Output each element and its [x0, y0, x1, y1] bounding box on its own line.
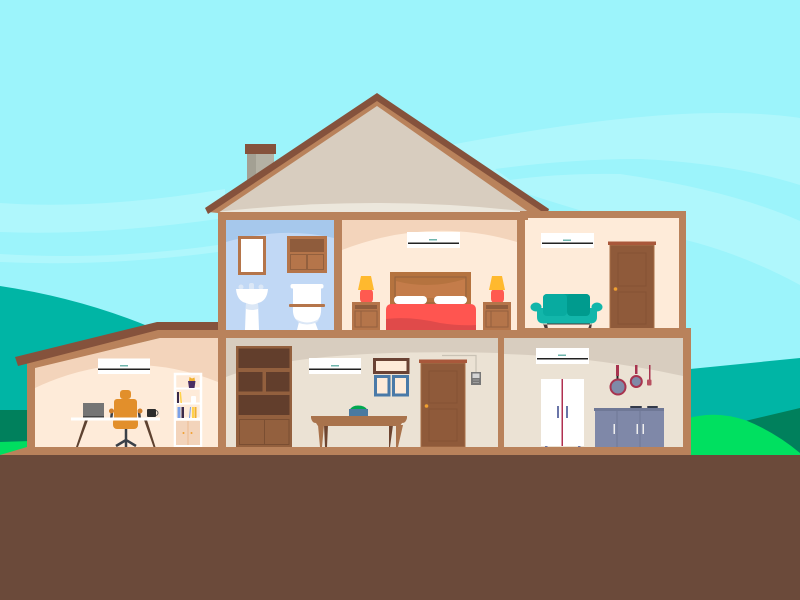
table — [311, 416, 407, 447]
wall cabinet — [287, 236, 327, 273]
bookshelf — [175, 374, 201, 446]
door — [608, 242, 656, 329]
counter — [594, 408, 664, 447]
sky — [0, 0, 800, 460]
desk — [71, 418, 160, 447]
roof — [205, 93, 549, 215]
left nightstand — [352, 302, 380, 330]
air conditioner — [407, 232, 460, 248]
panel: lounge — [525, 218, 679, 329]
panel: bedroom — [342, 220, 517, 330]
stove — [630, 406, 658, 408]
hills — [0, 286, 800, 460]
air conditioner — [536, 348, 589, 364]
office wall and roof trim — [15, 322, 218, 447]
picture frame: right — [394, 376, 408, 395]
upper walls and beams — [218, 211, 691, 338]
thermostat — [442, 356, 481, 385]
ground — [0, 455, 800, 600]
plant — [349, 406, 368, 416]
panel: kitchen — [504, 338, 683, 448]
bed — [386, 272, 476, 330]
office chair — [109, 390, 142, 447]
left bedside lamp — [358, 276, 374, 303]
panel: living room — [226, 338, 498, 447]
right nightstand — [483, 302, 511, 330]
mirror — [240, 238, 264, 274]
mug — [147, 409, 158, 417]
lower walls and floor — [0, 328, 691, 455]
air conditioner — [98, 358, 150, 374]
fridge — [541, 379, 584, 448]
toilet — [289, 284, 325, 330]
air conditioner — [309, 358, 361, 374]
picture frame: wide — [374, 360, 408, 372]
air conditioner — [541, 233, 594, 248]
bookcase — [236, 346, 292, 447]
picture frame: left — [376, 376, 389, 395]
laptop — [83, 403, 104, 418]
panel: office — [15, 322, 218, 447]
spatula — [647, 365, 652, 386]
right bedside lamp — [489, 276, 505, 303]
frying pan: large — [610, 365, 626, 394]
sofa — [530, 294, 602, 329]
sink — [236, 283, 268, 330]
panel: bathroom — [226, 220, 334, 330]
chimney — [245, 144, 276, 182]
attic — [216, 104, 530, 212]
door — [419, 360, 467, 447]
frying pan: small — [631, 365, 642, 387]
